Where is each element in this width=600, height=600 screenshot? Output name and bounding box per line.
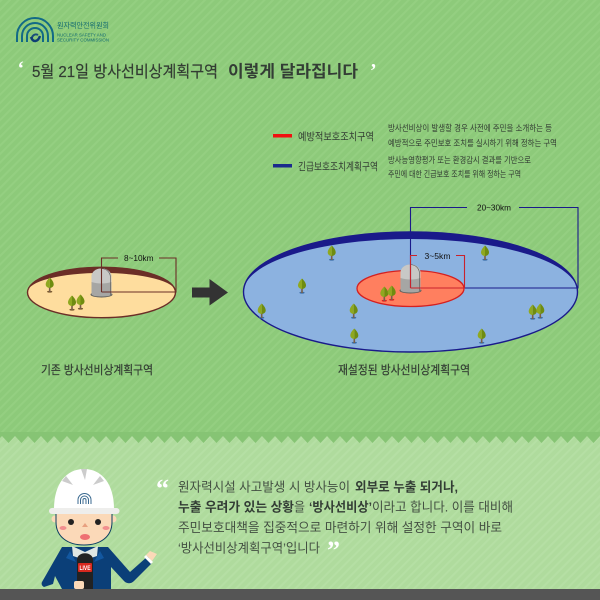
text block: explanation: 원자력시설 사고발생 시 방사능이 xyxy=(178,480,350,494)
text block: explanation: 외부로 누출 되거나, xyxy=(355,480,458,494)
icon: trees in outer zone xyxy=(258,246,544,344)
text block: explanation: ” xyxy=(327,536,340,565)
text block: explanation xyxy=(156,474,513,565)
arrow xyxy=(192,279,228,306)
logo: Nuclear Safety and Security Commission xyxy=(17,18,109,42)
title: ’ xyxy=(370,60,377,82)
caption: previous zone: 기존 방사선비상계획구역 xyxy=(41,363,153,377)
ears xyxy=(52,516,58,522)
logo text xyxy=(57,20,109,42)
microphone: LIVE xyxy=(80,566,90,572)
logo text: 원자력안전위원회 xyxy=(57,20,109,30)
panel: bottom explanation xyxy=(0,432,600,600)
legend xyxy=(273,123,557,179)
legend: urgent protective zone: 방사능영향평가 또는 환경감시 결과를 기반으로 xyxy=(388,155,531,165)
text block: explanation: ‘방사선비상계획구역’입니다 xyxy=(178,540,320,556)
lapels xyxy=(66,551,104,562)
radius marker 8~10km xyxy=(102,254,176,292)
jacket and arms xyxy=(42,547,152,589)
text block: explanation: “ xyxy=(156,474,169,503)
diagram: previous planning zone xyxy=(28,254,176,318)
text block: explanation: 을 xyxy=(294,500,305,514)
hard hat xyxy=(49,469,120,514)
legend: precautionary zone xyxy=(273,123,557,148)
legend: urgent protective zone: 주민에 대한 긴급보호 조치를 위해 정하는 구역 xyxy=(388,169,521,179)
radius marker 20~30km xyxy=(410,204,578,288)
hand raised xyxy=(144,551,157,564)
icon: concentric arches xyxy=(17,18,53,42)
legend: urgent protective zone: 긴급보호조치계획구역 xyxy=(298,161,378,173)
text block: explanation: 주민보호대책을 집중적으로 마련하기 위해 설정한 구역이 바로 xyxy=(178,520,502,535)
radius marker 3~5km xyxy=(410,252,464,288)
text block: explanation: ‘방사선비상’ xyxy=(309,500,372,514)
character: reporter in hard hat xyxy=(42,469,157,589)
legend: precautionary zone: 예방적보호조치구역 xyxy=(298,130,374,143)
legend: urgent protective zone xyxy=(273,155,531,179)
legend: precautionary zone: 방사선비상이 발생할 경우 사전에 주민을 소개하는 등 xyxy=(388,123,552,133)
text block: explanation: 누출 우려가 있는 상황 xyxy=(178,500,294,514)
icon: reactor dome xyxy=(400,264,422,294)
bottom bar xyxy=(0,589,600,600)
icon: reactor dome xyxy=(90,268,112,298)
caption: reset zone: 재설정된 방사선비상계획구역 xyxy=(338,363,470,377)
logo text: SECURITY COMMISSION xyxy=(57,38,109,42)
inner red zone xyxy=(357,270,464,306)
face xyxy=(56,512,112,545)
zigzag edge xyxy=(0,432,600,443)
legend: precautionary zone: 예방적으로 주민보호 조치를 실시하기 위해 정하는 구역 xyxy=(388,138,557,148)
radius marker 3~5km: 3~5km xyxy=(424,252,451,261)
title: 이렇게 달라집니다 xyxy=(228,62,358,81)
radius marker 8~10km: 8~10km xyxy=(124,254,154,263)
title xyxy=(18,58,377,82)
logo text: NUCLEAR SAFETY AND xyxy=(57,32,107,38)
text block: explanation: 이라고 합니다. 이를 대비해 xyxy=(372,500,513,514)
icon: trees xyxy=(46,278,84,311)
icon: trees in inner zone xyxy=(380,286,396,302)
facial features xyxy=(60,519,110,540)
title: ‘ xyxy=(18,58,24,80)
collar xyxy=(72,546,98,560)
radius marker 20~30km: 20~30km xyxy=(477,204,511,212)
diagram: reset planning zone xyxy=(244,204,578,352)
title: 5월 21일 방사선비상계획구역 xyxy=(32,63,218,81)
